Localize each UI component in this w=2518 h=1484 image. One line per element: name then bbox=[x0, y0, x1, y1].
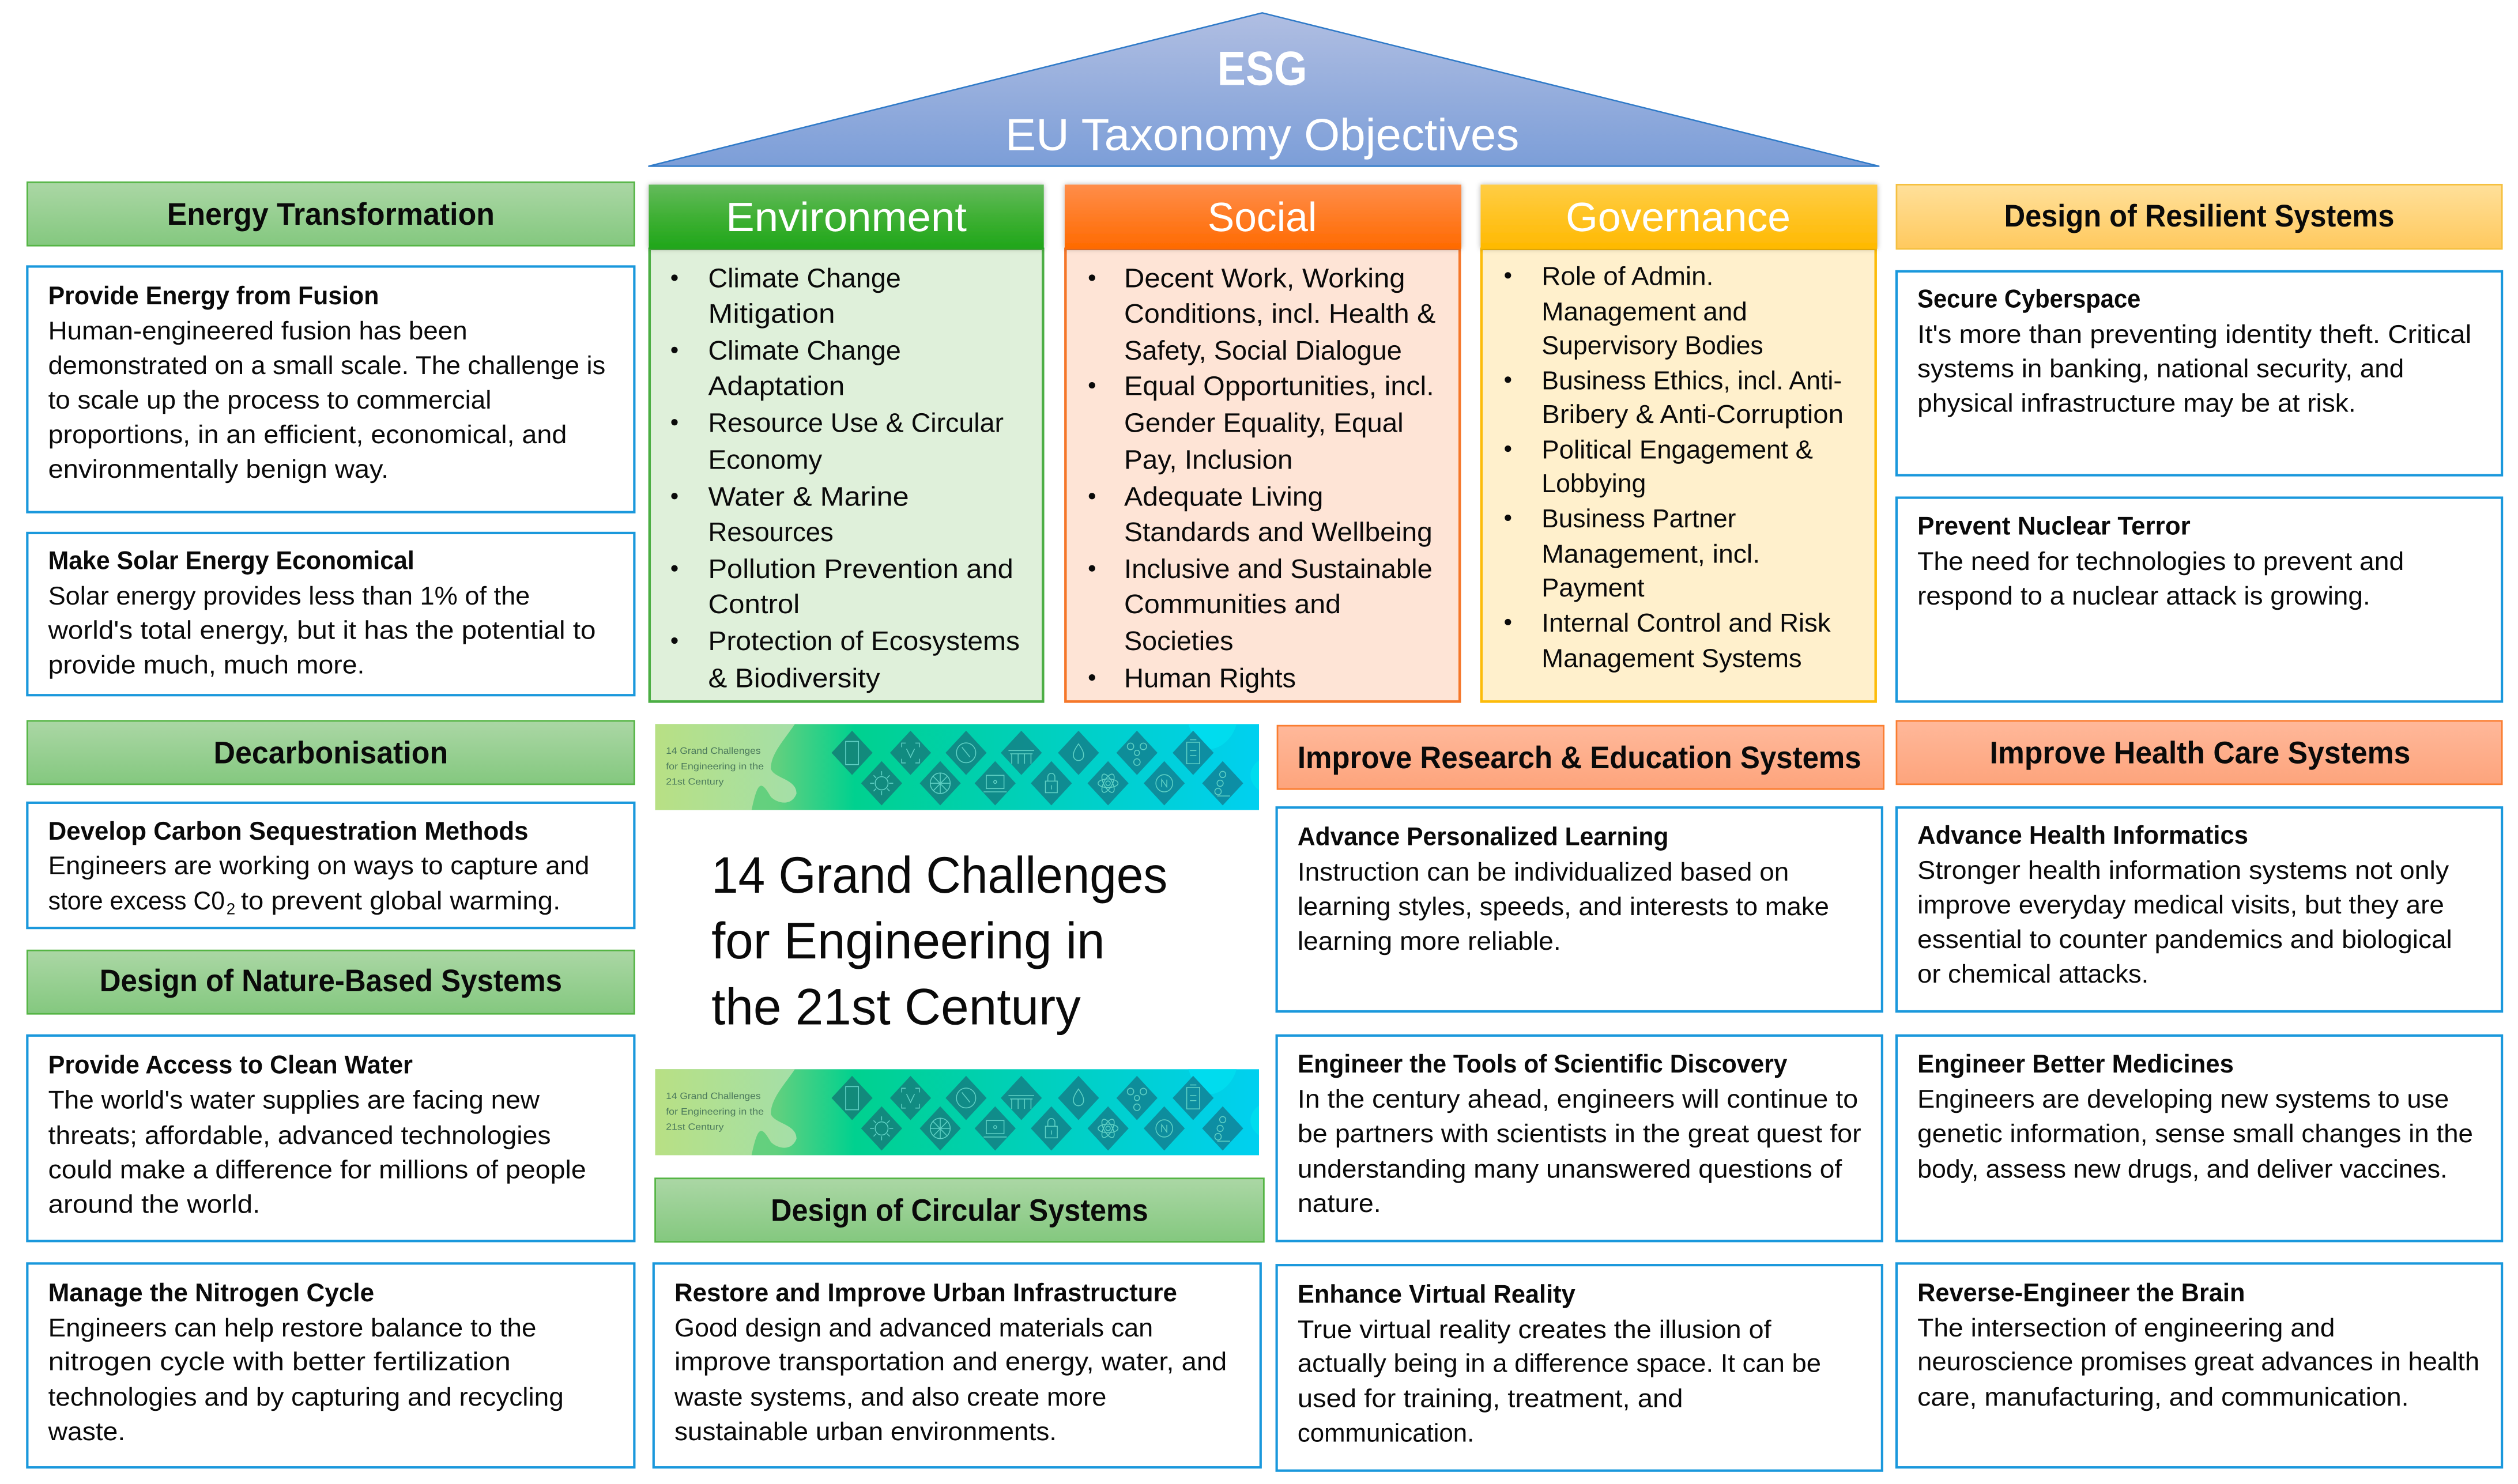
panel: Prevent Nuclear Terror bbox=[1897, 498, 2502, 701]
header: Energy Transformation: Energy Transformation bbox=[167, 198, 495, 233]
panel: Provide Energy from Fusion: Provide Energy from Fusion bbox=[48, 284, 379, 311]
header: Design of Resilient Systems bbox=[1897, 184, 2502, 249]
list: social objectives: Conditions, incl. Health & bbox=[1124, 299, 1435, 329]
list: environment objectives: Pollution Prevention and bbox=[708, 554, 1013, 584]
panel: Manage the Nitrogen Cycle bbox=[27, 1263, 634, 1467]
panel: Engineer the Tools of Scientific Discovery: nature. bbox=[1298, 1191, 1381, 1218]
panel: Develop Carbon Sequestration Methods: Develop Carbon Sequestration Methods bbox=[48, 819, 529, 846]
roof: ESG EU Taxonomy Objectives bbox=[649, 13, 1879, 166]
panel: Manage the Nitrogen Cycle: Manage the Nitrogen Cycle bbox=[48, 1281, 374, 1308]
panel: Reverse-Engineer the Brain: Reverse-Engineer the Brain bbox=[1917, 1281, 2245, 1308]
panel: Restore and Improve Urban Infrastructure: Restore and Improve Urban Infrastructure bbox=[674, 1281, 1177, 1308]
roof subtitle: EU Taxonomy Objectives bbox=[1005, 110, 1519, 160]
panel: Restore and Improve Urban Infrastructure: improve transportation and energy, water, and bbox=[674, 1349, 1227, 1377]
title: 14 Grand Challenges for Engineering in the 21st Century bbox=[711, 846, 1167, 1036]
panel: Manage the Nitrogen Cycle: waste. bbox=[47, 1419, 125, 1447]
image banner: top 14 Grand Challenges: 21st Century bbox=[666, 778, 724, 788]
column: Environment bbox=[649, 184, 1044, 701]
header: Improve Health Care Systems: Improve Health Care Systems bbox=[1990, 736, 2411, 772]
list: environment objectives: Climate Change bbox=[708, 263, 901, 294]
panel: Engineer Better Medicines: Engineers are developing new systems to use bbox=[1917, 1087, 2449, 1114]
panel: Provide Energy from Fusion: demonstrated on a small scale. The challenge is bbox=[48, 353, 605, 380]
panel: Secure Cyberspace: systems in banking, national security, and bbox=[1917, 356, 2404, 384]
panel: Make Solar Energy Economical: Make Solar Energy Economical bbox=[48, 548, 414, 576]
header: Decarbonisation bbox=[27, 721, 634, 784]
title: 14 Grand Challenges for Engineering in the 21st Century: 14 Grand Challenges bbox=[711, 846, 1167, 904]
image banner: bottom 14 Grand Challenges: 21st Century bbox=[666, 1123, 724, 1133]
header: Improve Research & Education Systems: Improve Research & Education Systems bbox=[1298, 741, 1861, 776]
list: social objectives: Human Rights bbox=[1124, 663, 1296, 693]
panel: Engineer Better Medicines: body, assess new drugs, and deliver vaccines. bbox=[1917, 1157, 2447, 1184]
panel: Enhance Virtual Reality: actually being in a difference space. It can be bbox=[1298, 1351, 1821, 1379]
panel: Reverse-Engineer the Brain: The intersection of engineering and bbox=[1917, 1316, 2335, 1343]
list: governance objectives bbox=[1505, 262, 1844, 674]
panel: Provide Energy from Fusion: to scale up the process to commercial bbox=[48, 388, 491, 415]
panel: Enhance Virtual Reality: used for training, treatment, and bbox=[1298, 1386, 1683, 1414]
list: social objectives: Equal Opportunities, incl. bbox=[1124, 371, 1434, 401]
panel: Provide Access to Clean Water: Provide Access to Clean Water bbox=[48, 1052, 413, 1079]
panel: Manage the Nitrogen Cycle: nitrogen cycle with better fertilization bbox=[48, 1349, 511, 1377]
panel: Make Solar Energy Economical: provide much, much more. bbox=[48, 652, 364, 680]
list: governance objectives: Payment bbox=[1541, 574, 1645, 603]
panel: Advance Personalized Learning bbox=[1277, 807, 1882, 1011]
list: environment objectives: & Biodiversity bbox=[708, 663, 881, 693]
panel: Advance Personalized Learning: Advance Personalized Learning bbox=[1298, 824, 1668, 852]
list: social objectives: Inclusive and Sustainable bbox=[1124, 554, 1433, 584]
panel: Enhance Virtual Reality: communication. bbox=[1298, 1421, 1474, 1448]
header: Energy Transformation bbox=[27, 182, 634, 246]
list: governance objectives: Management and bbox=[1541, 298, 1747, 327]
panel: Prevent Nuclear Terror: Prevent Nuclear Terror bbox=[1917, 513, 2191, 541]
list: social objectives: Adequate Living bbox=[1124, 482, 1323, 512]
list: environment objectives: Water & Marine bbox=[708, 482, 909, 512]
panel: Manage the Nitrogen Cycle: Engineers can help restore balance to the bbox=[48, 1316, 537, 1343]
column heading: Governance: Governance bbox=[1566, 196, 1791, 241]
panel: Provide Energy from Fusion: proportions, in an efficient, economical, and bbox=[48, 422, 567, 450]
panel: Provide Access to Clean Water bbox=[27, 1036, 634, 1241]
image banner: top 14 Grand Challenges bbox=[655, 724, 1259, 810]
image banner: top 14 Grand Challenges: 14 Grand Challenges bbox=[666, 746, 761, 757]
list: governance objectives: Internal Control and Risk bbox=[1541, 609, 1832, 638]
panel: Advance Personalized Learning: learning styles, speeds, and interests to make bbox=[1298, 894, 1829, 922]
panel: Engineer Better Medicines: Engineer Better Medicines bbox=[1917, 1052, 2234, 1079]
panel: Enhance Virtual Reality: Enhance Virtual Reality bbox=[1298, 1282, 1575, 1309]
list: social objectives: Safety, Social Dialogue bbox=[1124, 335, 1402, 366]
list: social objectives: Pay, Inclusion bbox=[1124, 445, 1292, 475]
panel: Enhance Virtual Reality bbox=[1277, 1265, 1882, 1471]
list: social objectives: Gender Equality, Equal bbox=[1124, 408, 1404, 439]
title: 14 Grand Challenges for Engineering in the 21st Century: for Engineering in bbox=[711, 912, 1105, 970]
image banner: bottom 14 Grand Challenges: for Engineering in the bbox=[666, 1107, 764, 1118]
panel: Reverse-Engineer the Brain bbox=[1897, 1263, 2502, 1467]
image banner: top 14 Grand Challenges: for Engineering in the bbox=[666, 761, 764, 773]
panel: Secure Cyberspace: It's more than preventing identity theft. Critical bbox=[1917, 322, 2471, 349]
list: governance objectives: Political Engagement & bbox=[1541, 436, 1814, 465]
panel: Develop Carbon Sequestration Methods: store excess C0 bbox=[48, 889, 225, 916]
roof title: ESG: ESG bbox=[1217, 43, 1307, 96]
panel: Make Solar Energy Economical: world's total energy, but it has the potential to bbox=[47, 618, 596, 645]
panel: Provide Energy from Fusion: Human-engineered fusion has been bbox=[48, 319, 468, 346]
list: governance objectives: Business Ethics, incl. Anti- bbox=[1541, 367, 1842, 396]
panel: Advance Health Informatics: improve everyday medical visits, but they are bbox=[1917, 893, 2444, 920]
panel: Provide Access to Clean Water: The world's water supplies are facing new bbox=[48, 1087, 540, 1115]
panel: Secure Cyberspace: physical infrastructure may be at risk. bbox=[1917, 391, 2356, 418]
panel: Secure Cyberspace bbox=[1897, 271, 2502, 475]
panel: Develop Carbon Sequestration Methods: Engineers are working on ways to capture and bbox=[48, 854, 589, 881]
list: governance objectives: Role of Admin. bbox=[1541, 262, 1713, 292]
panel: Develop Carbon Sequestration Methods: 2 bbox=[227, 901, 236, 919]
panel: Advance Health Informatics: Advance Health Informatics bbox=[1917, 823, 2248, 850]
panel: Secure Cyberspace: Secure Cyberspace bbox=[1917, 286, 2141, 314]
panel: Reverse-Engineer the Brain: neuroscience promises great advances in health bbox=[1917, 1349, 2479, 1377]
header: Design of Nature-Based Systems: Design of Nature-Based Systems bbox=[100, 964, 562, 999]
list: environment objectives: Protection of Ecosystems bbox=[708, 626, 1020, 656]
panel: Advance Personalized Learning: Instruction can be individualized based on bbox=[1298, 860, 1789, 887]
panel: Advance Personalized Learning: learning more reliable. bbox=[1298, 929, 1561, 956]
list: environment objectives bbox=[671, 263, 1020, 693]
panel: Restore and Improve Urban Infrastructure: sustainable urban environments. bbox=[674, 1419, 1057, 1447]
list: governance objectives: Lobbying bbox=[1541, 470, 1646, 499]
list: environment objectives: Resource Use & Circular bbox=[708, 408, 1004, 439]
list: environment objectives: Resources bbox=[708, 517, 834, 547]
panel: Provide Energy from Fusion bbox=[27, 266, 634, 512]
panel: Make Solar Energy Economical bbox=[27, 533, 634, 695]
column heading: Environment: Environment bbox=[726, 196, 967, 241]
panel: Develop Carbon Sequestration Methods bbox=[27, 803, 634, 928]
list: governance objectives: Bribery & Anti-Corruption bbox=[1541, 401, 1844, 429]
panel: Enhance Virtual Reality: True virtual reality creates the illusion of bbox=[1298, 1317, 1772, 1345]
panel: Manage the Nitrogen Cycle: technologies and by capturing and recycling bbox=[48, 1385, 564, 1412]
header: Decarbonisation: Decarbonisation bbox=[213, 736, 448, 772]
panel: Provide Access to Clean Water: around the world. bbox=[48, 1192, 260, 1219]
panel: Engineer the Tools of Scientific Discovery: understanding many unanswered questions of bbox=[1298, 1157, 1843, 1184]
panel: Make Solar Energy Economical: Solar energy provides less than 1% of the bbox=[48, 584, 530, 611]
column heading: Social: Social bbox=[1208, 196, 1317, 241]
list: environment objectives: Mitigation bbox=[708, 299, 835, 329]
list: governance objectives: Management Systems bbox=[1541, 644, 1802, 674]
list: social objectives: Decent Work, Working bbox=[1124, 263, 1405, 294]
panel: Prevent Nuclear Terror: respond to a nuclear attack is growing. bbox=[1917, 584, 2370, 611]
image banner: bottom 14 Grand Challenges bbox=[655, 1069, 1259, 1156]
header: Design of Nature-Based Systems bbox=[27, 950, 634, 1014]
list: governance objectives: Business Partner bbox=[1541, 505, 1737, 534]
title: 14 Grand Challenges for Engineering in the 21st Century: the 21st Century bbox=[711, 978, 1081, 1036]
panel: Engineer the Tools of Scientific Discovery bbox=[1277, 1036, 1882, 1241]
header: Design of Circular Systems: Design of Circular Systems bbox=[771, 1194, 1148, 1229]
list: governance objectives: Management, incl. bbox=[1541, 540, 1760, 569]
panel: Engineer the Tools of Scientific Discovery: be partners with scientists in the great quest for bbox=[1298, 1122, 1863, 1149]
panel: Provide Access to Clean Water: could make a difference for millions of people bbox=[48, 1158, 586, 1185]
header: Design of Resilient Systems: Design of Resilient Systems bbox=[2004, 199, 2395, 235]
list: environment objectives: Climate Change bbox=[708, 335, 901, 366]
panel: Reverse-Engineer the Brain: care, manufacturing, and communication. bbox=[1917, 1385, 2409, 1412]
list: environment objectives: Control bbox=[708, 589, 800, 620]
panel: Provide Energy from Fusion: environmentally benign way. bbox=[48, 457, 389, 484]
panel: Restore and Improve Urban Infrastructure bbox=[654, 1263, 1261, 1467]
list: environment objectives: Adaptation bbox=[708, 371, 845, 401]
panel: Engineer Better Medicines: genetic information, sense small changes in the bbox=[1917, 1122, 2473, 1149]
header: Improve Health Care Systems bbox=[1897, 721, 2502, 784]
header: Design of Circular Systems bbox=[655, 1179, 1264, 1242]
panel: Engineer the Tools of Scientific Discovery: In the century ahead, engineers will continue to bbox=[1298, 1087, 1858, 1114]
header: Improve Research & Education Systems bbox=[1277, 726, 1884, 789]
panel: Advance Health Informatics bbox=[1897, 807, 2502, 1011]
column: Social bbox=[1065, 184, 1461, 701]
panel: Advance Health Informatics: or chemical attacks. bbox=[1917, 962, 2148, 989]
list: environment objectives: Economy bbox=[708, 445, 823, 475]
list: governance objectives: Supervisory Bodies bbox=[1541, 331, 1763, 360]
panel: Restore and Improve Urban Infrastructure: waste systems, and also create more bbox=[673, 1385, 1107, 1412]
panel: Restore and Improve Urban Infrastructure: Good design and advanced materials can bbox=[674, 1316, 1153, 1343]
panel: Provide Access to Clean Water: threats; affordable, advanced technologies bbox=[48, 1123, 551, 1150]
panel: Prevent Nuclear Terror: The need for technologies to prevent and bbox=[1917, 549, 2404, 576]
panel: Engineer Better Medicines bbox=[1897, 1036, 2502, 1241]
column: Governance bbox=[1480, 184, 1877, 701]
panel: Advance Health Informatics: Stronger health information systems not only bbox=[1917, 858, 2449, 885]
panel: Engineer the Tools of Scientific Discovery: Engineer the Tools of Scientific Discovery bbox=[1298, 1052, 1788, 1079]
panel: Develop Carbon Sequestration Methods: to prevent global warming. bbox=[241, 889, 560, 916]
image banner: bottom 14 Grand Challenges: 14 Grand Challenges bbox=[666, 1091, 761, 1102]
panel: Advance Health Informatics: essential to counter pandemics and biological bbox=[1917, 927, 2452, 954]
list: social objectives: Societies bbox=[1124, 626, 1233, 656]
list: social objectives: Standards and Wellbeing bbox=[1124, 517, 1433, 547]
list: social objectives bbox=[1089, 263, 1435, 693]
list: social objectives: Communities and bbox=[1124, 589, 1341, 620]
